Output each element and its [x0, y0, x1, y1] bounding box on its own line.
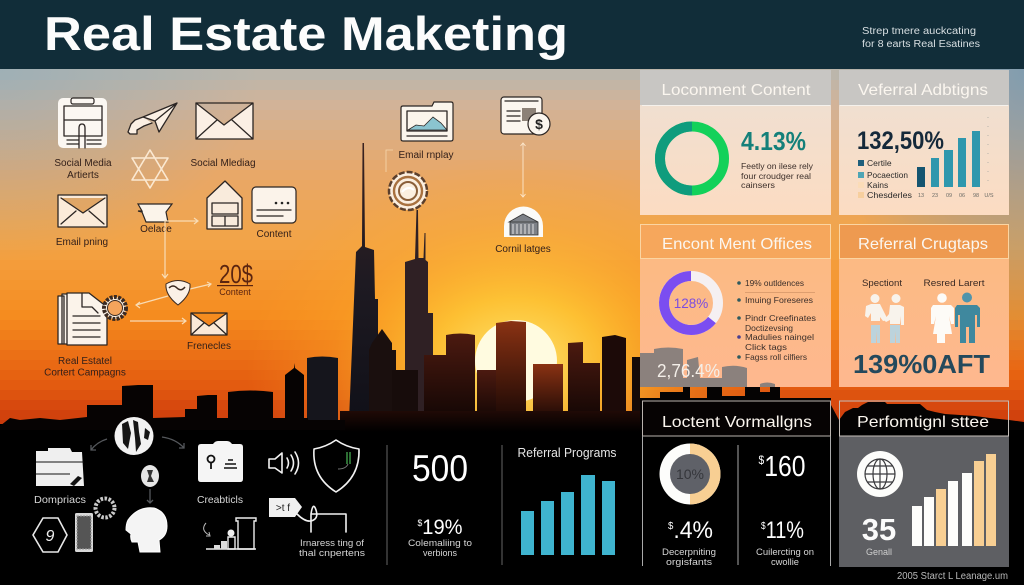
header subtitle	[862, 26, 980, 50]
caption: colemaliing	[408, 538, 472, 559]
panel: performance	[839, 401, 1009, 567]
bracket connector	[386, 150, 393, 172]
bullet list: Madulies naingel	[745, 332, 814, 342]
icon: image card	[401, 102, 453, 141]
icon: calculator	[75, 513, 93, 552]
stat $19%: 19%	[422, 516, 462, 539]
panel: encont ment offices	[640, 224, 831, 387]
panel heading	[840, 401, 1008, 436]
icon: tag: >t f	[276, 503, 290, 514]
bullet list: Doctizevsing	[745, 323, 793, 333]
label: frenecles: Frenecles	[187, 341, 231, 352]
icon: browser with dollar coin	[501, 97, 550, 135]
captions: cwollie	[771, 557, 799, 568]
icon: paper plane	[128, 103, 177, 134]
divider lines	[387, 445, 502, 565]
bar chart	[912, 454, 996, 546]
captions: orgisfants	[666, 557, 712, 568]
referral programs bar chart	[518, 446, 616, 555]
description	[741, 162, 813, 190]
label: creabticls: Creabticls	[197, 494, 243, 506]
icon: document stack with gear	[58, 293, 126, 345]
label: real estate content campaigns: Real Estatel	[58, 356, 112, 367]
label: content: Content	[256, 229, 292, 240]
panel: loconment content	[640, 70, 831, 215]
header subtitle: for 8 earts Real Esatines	[862, 39, 980, 50]
donut chart tan: 10%	[676, 466, 704, 482]
label: cornil latges: Cornil latges	[495, 244, 551, 255]
header bar	[0, 0, 1024, 69]
legend: Certile	[867, 158, 892, 168]
label: social mlediag: Social Mlediag	[190, 158, 256, 169]
panel heading: Referral Crugtaps	[858, 236, 988, 253]
caption: irnaress: thal cnpertens	[299, 548, 365, 559]
stat $.4%: $	[668, 521, 674, 532]
column labels	[862, 278, 985, 289]
captions: Decerpniting	[662, 547, 716, 558]
connector arrows	[130, 218, 211, 324]
icon: globe white	[114, 417, 154, 455]
chart title: Referral Programs	[518, 446, 616, 460]
caption: colemaliing: Colemaliing to	[408, 538, 472, 549]
description: Feetly on ilese rely	[741, 162, 813, 171]
legend: Pocaection	[867, 170, 908, 180]
bar chart: 09	[946, 193, 952, 199]
panel: veferral adbtigns	[839, 70, 1009, 215]
stat $.4%: .4%	[673, 517, 713, 544]
captions	[662, 547, 814, 568]
bar chart: U/S	[984, 193, 994, 199]
panel heading	[840, 224, 1008, 258]
price label 20$: Content	[219, 287, 251, 297]
stat $11%: 11%	[766, 517, 804, 544]
caption: irnaress	[299, 538, 365, 559]
description: cainsers	[741, 181, 775, 190]
stat 139% 0AFT: 139%0AFT	[853, 349, 990, 379]
bullet list: Pindr Creefinates	[745, 313, 816, 323]
title: Real Estate Maketing	[44, 7, 568, 60]
column labels: Resred Larert	[924, 278, 985, 289]
price label 20$: 20$	[219, 259, 253, 289]
stat caption: Genall	[866, 547, 892, 557]
icon: woman and man	[931, 292, 980, 343]
icon: browser card	[252, 187, 296, 223]
panel heading: Loconment Content	[662, 82, 811, 99]
column labels: Spectiont	[862, 278, 902, 289]
icon: envelope email	[58, 195, 107, 227]
panel heading	[839, 70, 1009, 106]
bar chart	[917, 117, 994, 199]
panel heading: Loctent Vormallgns	[662, 414, 812, 431]
panel heading: Veferral Adbtigns	[858, 82, 988, 99]
stat $11%: $	[761, 521, 766, 532]
icon: speaker	[269, 452, 298, 474]
icon: hexagon: 9	[46, 528, 55, 545]
icon: tag	[269, 498, 302, 517]
icon: shield	[314, 440, 359, 492]
panel heading	[640, 224, 830, 258]
icon: globe	[857, 451, 903, 497]
icon: hexagon	[33, 518, 67, 552]
label: social media artierts: Social Media	[54, 158, 112, 169]
stat $19%: $	[418, 518, 422, 528]
stat 2,76.4%: 2,76.4%	[657, 361, 720, 381]
stat 500: 500	[412, 448, 468, 489]
caption: irnaress: Irnaress ting of	[300, 538, 364, 549]
price label 20$	[217, 259, 253, 297]
bar chart: 23	[932, 193, 938, 199]
label: social media artierts: Artierts	[67, 170, 99, 181]
icon: envelope large	[196, 103, 253, 139]
stat $160: 160	[764, 451, 806, 483]
icon: bar chart with arrow	[204, 518, 256, 549]
bar chart: 13	[918, 193, 924, 199]
icon: bracket link	[297, 506, 346, 532]
icon: briefcase white	[198, 441, 243, 482]
description: four croudger real	[741, 172, 811, 181]
label: email rnplay: Email rnplay	[398, 150, 454, 161]
donut chart purple	[664, 276, 718, 330]
double arrow	[520, 143, 526, 197]
legend	[858, 158, 912, 200]
captions: Cuilercting on	[756, 547, 814, 558]
bullet list: Imuing Foreseres	[745, 295, 813, 305]
icon: bank	[504, 206, 543, 237]
stat 35: 35	[862, 512, 896, 547]
panel heading: Perfomtignl sttee	[857, 414, 989, 431]
panel: loctent vormallgns	[642, 401, 831, 568]
connector arrows dark	[91, 437, 184, 503]
header subtitle: Strep tmere auckcating	[862, 26, 976, 37]
black ground	[0, 424, 1024, 585]
bar chart: 98	[973, 193, 979, 199]
panel heading: Encont Ment Offices	[662, 236, 812, 253]
donut chart green	[660, 126, 724, 190]
bullet list	[737, 278, 816, 362]
icon: medal	[141, 465, 159, 487]
label: email pning: Email pning	[56, 237, 108, 248]
stat 132,50%: 132,50%	[857, 127, 944, 155]
caption: colemaliing: verbions	[423, 548, 457, 559]
bullet list: Fagss roll cilfiers	[745, 352, 807, 362]
legend: Kains	[867, 180, 888, 190]
label: dompriacs: Dompriacs	[34, 494, 86, 506]
city skyline silhouette	[0, 143, 1024, 432]
sun	[475, 320, 557, 402]
icon: ribbon	[138, 204, 172, 222]
icon: browser with dollar coin: $	[535, 116, 543, 132]
label: real estate content campaigns: Cortert Campagns	[44, 368, 126, 378]
bullet list: 19% outldences	[745, 278, 804, 288]
icon: shield badge	[166, 280, 190, 305]
skyline overlay	[640, 348, 775, 387]
stat $160: $	[758, 453, 764, 467]
legend: Chesderles	[867, 190, 912, 200]
bar chart: 06	[959, 193, 965, 199]
icon: envelope small	[191, 313, 227, 335]
stat 128%: 128%	[674, 296, 708, 311]
icon: head	[126, 508, 167, 552]
label: oelace: Oelace	[140, 224, 172, 235]
icon: folder	[36, 448, 84, 486]
panel heading	[642, 401, 830, 436]
icon: house	[207, 181, 242, 229]
icon: gear badge	[389, 172, 427, 210]
stat 4.13%: 4.13%	[741, 126, 806, 156]
icon: two people handshake	[865, 294, 904, 343]
donut chart tan	[660, 444, 720, 504]
icon group: social media clipboard	[58, 98, 107, 148]
icon: gear small	[96, 498, 114, 518]
panel heading	[640, 70, 831, 106]
bullet list: Click tags	[745, 342, 787, 352]
panel: referral crugtaps	[839, 224, 1009, 387]
footer note: 2005 Starct L Leanage.um	[897, 571, 1008, 582]
icon: hexagram star	[132, 150, 168, 188]
